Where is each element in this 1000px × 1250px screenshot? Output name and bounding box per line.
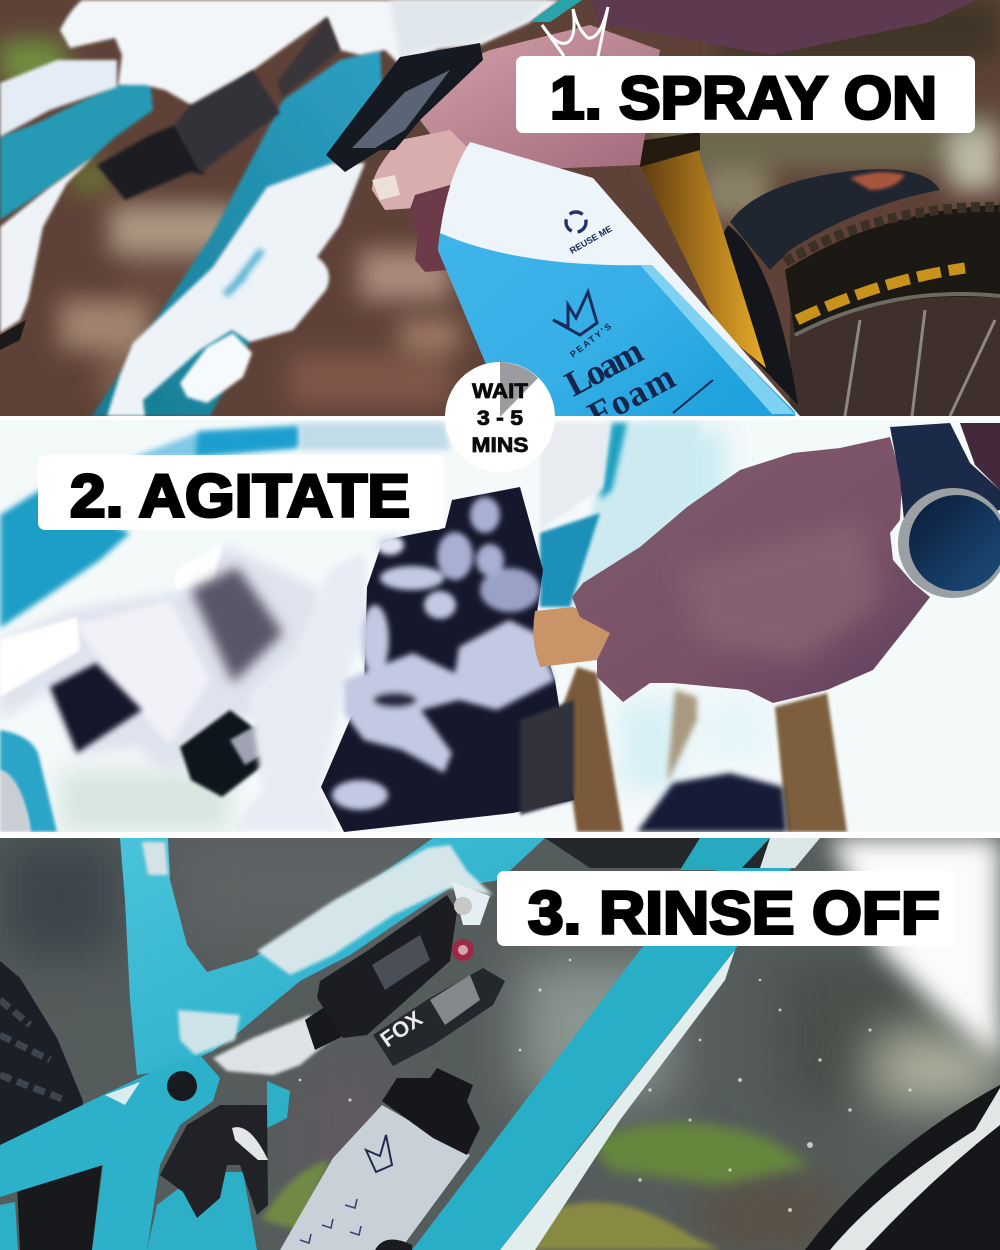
hoodie sleeve [590, 0, 975, 55]
badge: wait 3-5 mins timer: 3 - 5 [477, 407, 523, 430]
step label 3: rinse off: 3. RINSE OFF [528, 880, 940, 946]
dark tire left [0, 961, 103, 1250]
bottle [438, 142, 800, 438]
dark pivot hardware [0, 17, 340, 350]
pale background haze [60, 430, 770, 832]
dark shape under fork [637, 773, 787, 832]
foam on main tube [107, 163, 365, 416]
blurred forest floor background [0, 0, 1000, 405]
bottom right foamy tire [805, 1085, 1000, 1250]
hand [372, 25, 660, 272]
step label 2: agitate: 2. AGITATE [70, 462, 410, 530]
dark link hardware [160, 1105, 268, 1218]
bottle label: loam foam [562, 346, 677, 416]
water bottle [280, 1068, 480, 1250]
teal frame left [0, 490, 130, 628]
foam band beside tire [232, 553, 367, 830]
white flares [0, 543, 222, 697]
rear shock: FOX [376, 1005, 427, 1052]
teal ring bottom left [0, 730, 57, 832]
pivot hub [167, 1071, 197, 1101]
foam on top tube [257, 845, 493, 975]
dark suspension parts [50, 567, 283, 797]
wood fork stanchions [560, 667, 847, 832]
teal frame seat and top tube [120, 838, 545, 1075]
foam on left frame [0, 60, 117, 137]
panel: step 2 agitate photo [0, 420, 1000, 832]
wrist sleeve [960, 423, 1000, 490]
bottle label: loam foam: Loam [558, 330, 649, 404]
foam on top tube [60, 0, 560, 110]
crown outline [542, 7, 608, 56]
main teal frame tube [92, 50, 382, 416]
wheel [785, 205, 1000, 416]
pale fork crown right of tire [571, 421, 700, 608]
bottle label: crown logo [553, 292, 597, 335]
bottle label: loam foam: Foam [581, 356, 681, 435]
teal lower pieces [147, 1172, 257, 1250]
badge: wait 3-5 mins timer [445, 362, 555, 472]
tire brush [321, 487, 574, 832]
gold fork [640, 150, 766, 368]
fender [730, 169, 940, 270]
rear shock [213, 882, 505, 1075]
foam blobs on tire [332, 497, 555, 810]
teal lower link [0, 1055, 220, 1250]
hand holding brush [572, 437, 930, 703]
panel: step 3 rinse off photo [0, 838, 1000, 1250]
wood brush handle [533, 607, 617, 667]
badge: wait 3-5 mins timer: MINS [472, 434, 528, 457]
step label 1: spray on: 1. SPRAY ON [550, 64, 937, 132]
foam on right of badge [540, 423, 610, 530]
water spray droplets [299, 959, 912, 1212]
bottle label: peatys: PEATY'S [568, 320, 615, 360]
misty background [0, 838, 1000, 1250]
down tube [412, 838, 820, 1250]
badge: wait 3-5 mins timer: WAIT [472, 380, 528, 403]
watch [890, 423, 1000, 598]
left teal frame [0, 80, 153, 220]
foam on suspension [0, 545, 330, 770]
spray nozzle [326, 43, 483, 172]
bottle label: reuse me: REUSE ME [568, 224, 614, 256]
panel: step 1 spray on photo [0, 0, 1000, 438]
